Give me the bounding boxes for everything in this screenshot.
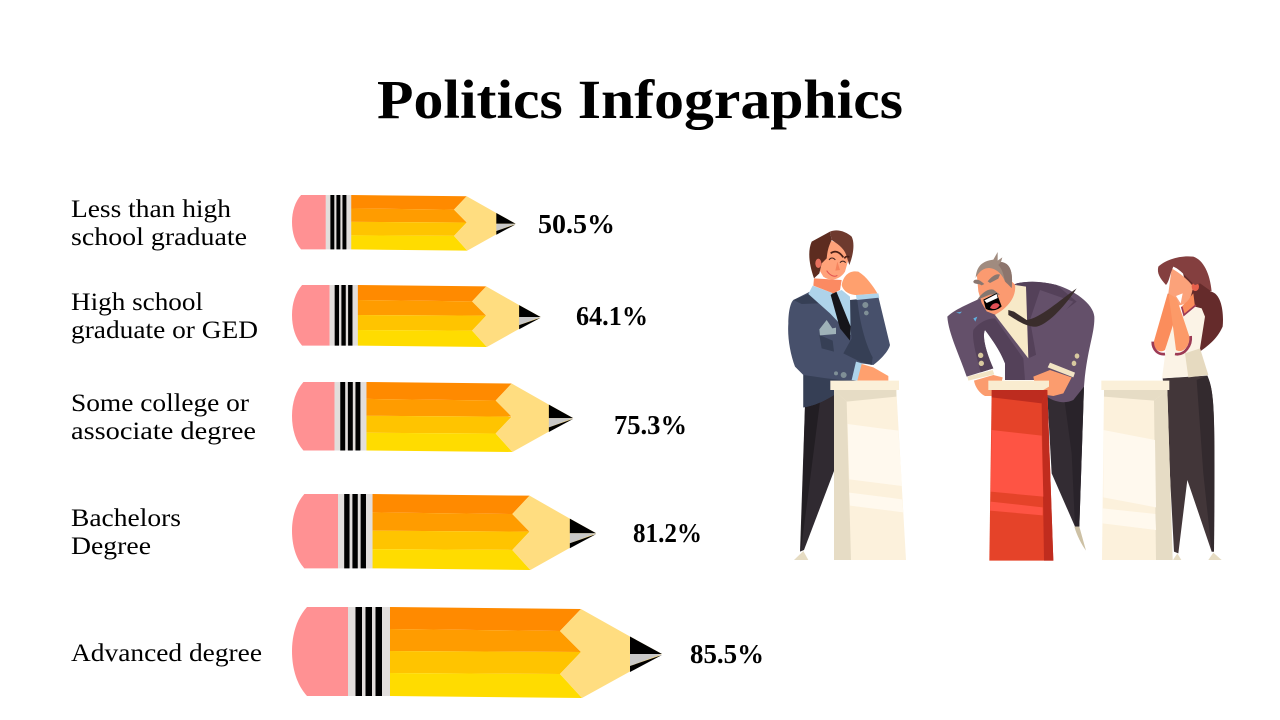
trousers [800, 393, 835, 552]
podium [989, 390, 1053, 561]
blouse [1162, 307, 1208, 378]
pencil: 81.2% [292, 494, 596, 570]
value: 64.1%: 64.1% [576, 301, 648, 331]
hair [809, 232, 832, 278]
shoe [794, 551, 808, 560]
ear [815, 259, 821, 268]
neck [1182, 293, 1195, 315]
value: 81.2%: 81.2% [633, 518, 702, 548]
label: less than high school graduate [71, 196, 247, 251]
value: 85.5%: 85.5% [690, 639, 764, 669]
hair [976, 252, 1012, 288]
ear [1192, 282, 1199, 291]
cuffs [1153, 342, 1165, 354]
hand on podium [857, 364, 888, 381]
right arm [1168, 293, 1190, 351]
label: high school graduate or GED [71, 289, 258, 344]
title: Politics Infographics [377, 69, 903, 130]
value: 50.5%: 50.5% [538, 209, 615, 239]
value: 75.3%: 75.3% [614, 410, 687, 440]
label: some college or associate degree: associate degree [71, 418, 256, 445]
label: some college or associate degree [71, 390, 256, 445]
podium [834, 390, 906, 560]
face [1168, 268, 1193, 305]
shoes [1173, 553, 1222, 560]
illustration: woman at white podium [1101, 256, 1223, 560]
podium [1102, 390, 1173, 560]
spit [956, 312, 977, 322]
label: less than high school graduate: school graduate [71, 224, 247, 251]
illustration: man at white podium [788, 230, 906, 560]
face [818, 240, 852, 279]
label: high school graduate or GED: High school [71, 289, 203, 316]
pencil: 64.1% [292, 285, 541, 347]
cuffs and buttons [967, 370, 994, 381]
jacket [788, 292, 890, 407]
shirt [995, 285, 1028, 358]
raised hand [842, 271, 877, 295]
label: high school graduate or GED: graduate or GED [71, 317, 258, 344]
label: bachelors degree: Degree [71, 533, 151, 560]
collar [1182, 305, 1196, 315]
neck [813, 278, 842, 293]
shirt and tie [808, 286, 851, 335]
label: less than high school graduate: Less than high [71, 196, 232, 223]
head [977, 266, 1015, 315]
trousers [1163, 376, 1214, 553]
left arm [1153, 293, 1177, 351]
pocket square [819, 320, 836, 335]
label: bachelors degree [71, 505, 181, 560]
back hair [1163, 258, 1223, 352]
moustache [977, 289, 1000, 300]
pencil: 50.5% [292, 195, 516, 251]
eyebrows [973, 274, 1000, 285]
buttons [834, 302, 869, 378]
shoe [1074, 527, 1086, 551]
illustration: shouting man at red podium [947, 252, 1094, 561]
label: some college or associate degree: Some college or [71, 390, 250, 417]
eyes and brows [829, 258, 846, 263]
pencil: 75.3% [292, 382, 573, 452]
teeth [1176, 293, 1183, 303]
trousers [1047, 387, 1084, 527]
hands [974, 375, 1003, 396]
front hair [1158, 256, 1212, 292]
label: advanced degree: Advanced degree [71, 640, 262, 667]
label: bachelors degree: Bachelors [71, 505, 181, 532]
tie [1008, 288, 1077, 327]
mouth [983, 293, 1002, 310]
nose and smile [835, 262, 840, 271]
pencil: 85.5% [292, 607, 662, 698]
jacket [947, 282, 1094, 402]
